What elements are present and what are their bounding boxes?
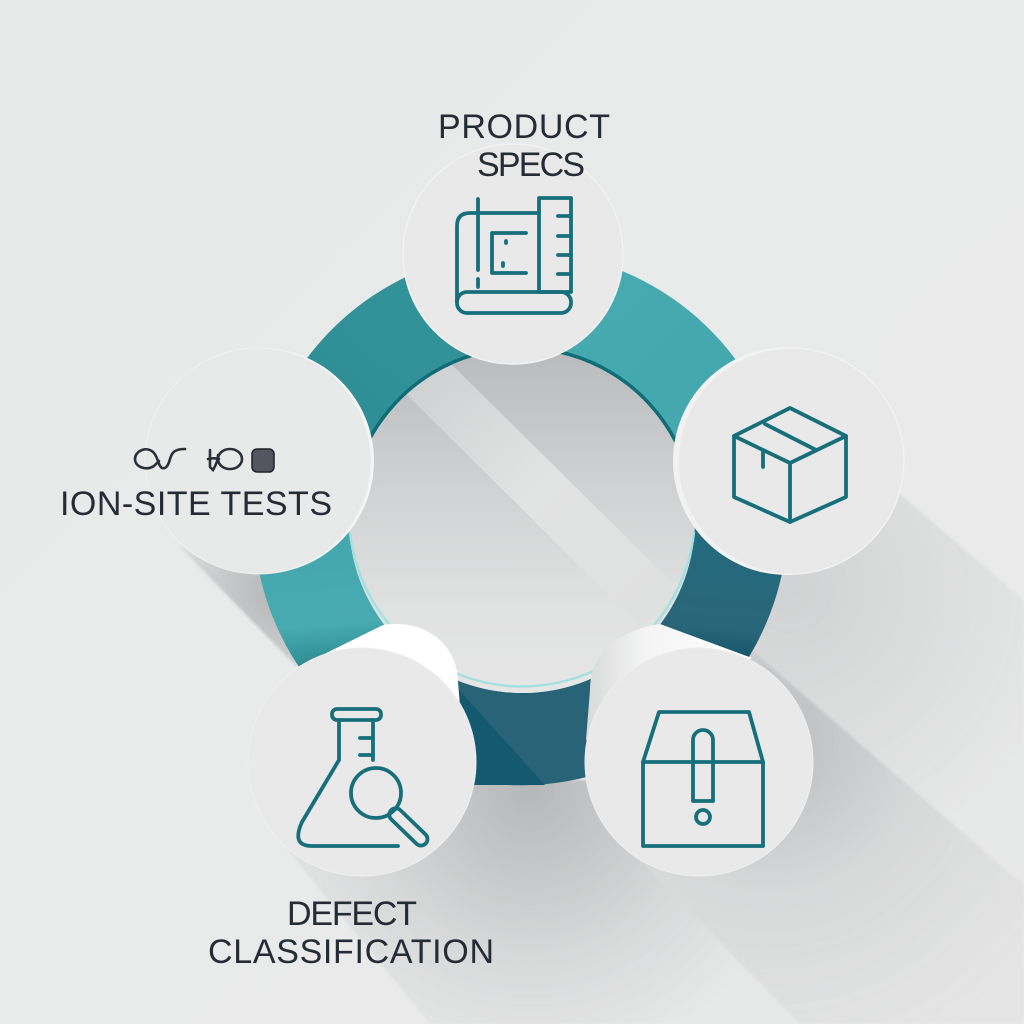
ring segment: top left xyxy=(260,251,522,483)
icon: blueprint and ruler xyxy=(457,198,571,313)
icon: box with exclamation mark xyxy=(643,712,763,846)
label: product specs xyxy=(438,108,610,184)
inner diagonal light band xyxy=(406,365,680,610)
icon: cylinder xyxy=(252,449,274,472)
label: defect classification xyxy=(208,895,494,971)
label: product specs: SPECS xyxy=(477,146,585,184)
node: package xyxy=(673,347,904,575)
icon: box xyxy=(734,408,846,522)
ring segment: top right xyxy=(521,251,782,484)
label: defect classification: DEFECT xyxy=(287,895,417,933)
label: product specs: PRODUCT xyxy=(438,108,610,146)
inner light rim xyxy=(350,532,694,686)
ring segment: lower right xyxy=(624,463,788,734)
node: defective package xyxy=(585,624,813,876)
icon: garbled test glyphs xyxy=(135,449,274,472)
inner dark rim xyxy=(368,348,676,442)
node: defect classification xyxy=(208,624,494,971)
cylinder side xyxy=(296,624,462,730)
ring bottom dark facet xyxy=(420,680,545,785)
offset circle edge xyxy=(673,347,901,575)
node: on-site tests xyxy=(60,348,374,574)
inner disc xyxy=(349,347,695,693)
ring segment: bottom xyxy=(375,660,678,785)
label: on-site tests: ION-SITE TESTS xyxy=(60,485,332,523)
label: defect classification: CLASSIFICATION xyxy=(208,933,494,971)
icon: flask and magnifier xyxy=(298,709,430,848)
ring segment: lower left xyxy=(254,461,428,742)
node: product specs xyxy=(403,108,623,364)
long diagonal shadows xyxy=(180,490,1024,1024)
rim highlight xyxy=(148,348,374,574)
ring xyxy=(254,251,788,785)
cylinder side xyxy=(586,624,752,740)
